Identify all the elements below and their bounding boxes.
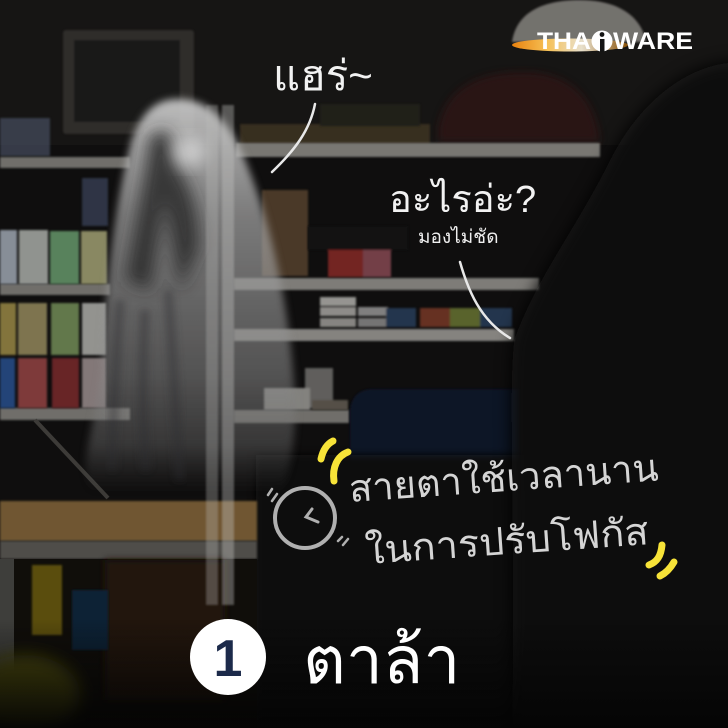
yellow quote marks: open xyxy=(321,441,348,481)
heading: ตาล้า xyxy=(303,623,460,697)
main caption xyxy=(348,446,660,573)
logo: ThaiWare xyxy=(512,28,693,55)
speech: blurry xyxy=(389,178,536,338)
pointer line: greeting xyxy=(272,104,315,172)
speech: blurry: มองไม่ชัด xyxy=(418,226,499,248)
lamp shade xyxy=(512,0,646,42)
upper left boxes xyxy=(0,178,108,408)
yellow quote marks: close xyxy=(649,545,674,576)
logo: ThaiWare: THA xyxy=(537,28,591,55)
logo: ThaiWare: WARE xyxy=(613,28,693,55)
speech: blurry: อะไรอ่ะ? xyxy=(389,178,536,221)
main caption: ในการปรับโฟกัส xyxy=(364,509,650,573)
dark blue chair xyxy=(350,389,520,470)
speech: greeting xyxy=(272,52,373,172)
shelf boards xyxy=(0,143,600,423)
diagonal support xyxy=(35,420,108,498)
number badge: 1 xyxy=(214,630,242,688)
clock icon xyxy=(268,488,348,548)
hair shadows xyxy=(126,130,198,290)
wood table xyxy=(0,501,257,541)
shelf contents top xyxy=(240,124,430,144)
pointer line: blurry xyxy=(460,262,510,338)
main caption: สายตาใช้เวลานาน xyxy=(348,446,660,511)
speech: greeting: แฮร่~ xyxy=(273,52,373,99)
monitor xyxy=(0,30,194,156)
brown box xyxy=(262,190,308,276)
items on right shelves xyxy=(264,226,512,410)
number badge xyxy=(190,619,266,695)
doorway strip xyxy=(206,105,218,605)
ghost figure xyxy=(86,99,295,605)
